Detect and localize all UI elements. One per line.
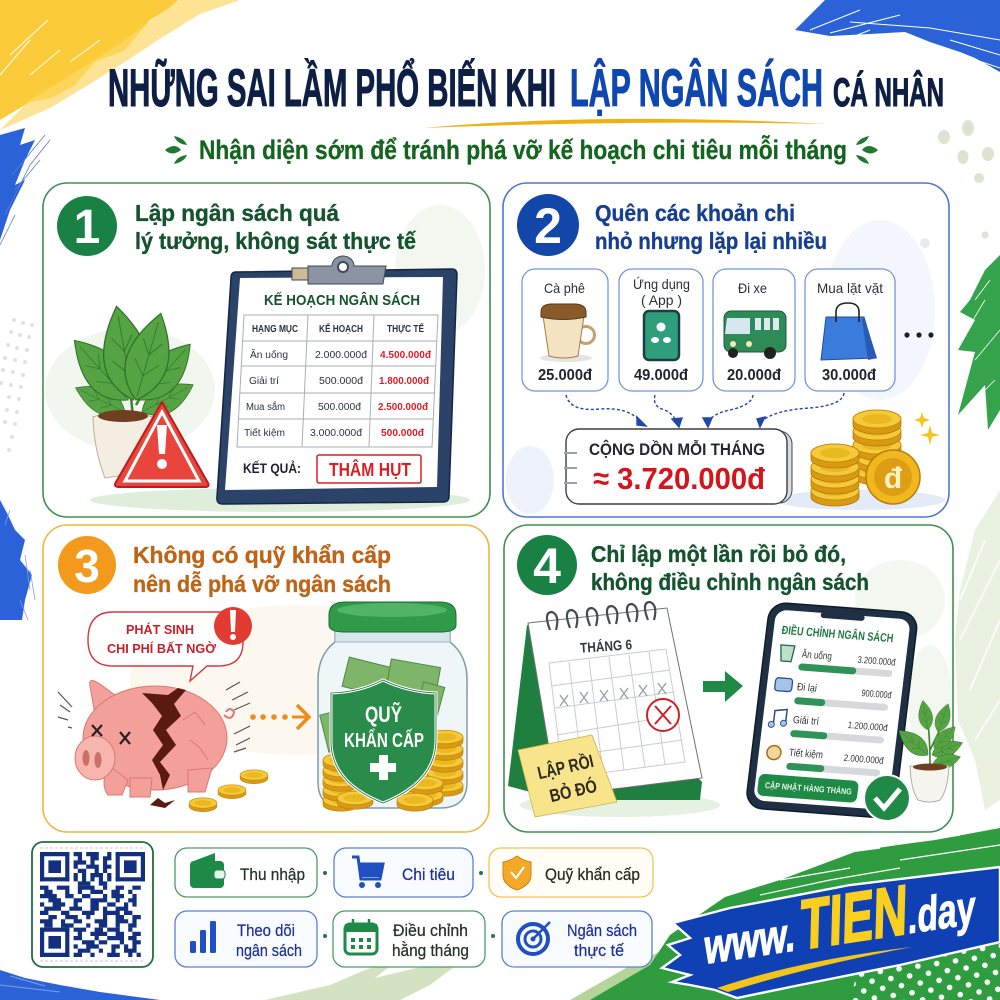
website text: www. — [703, 907, 796, 975]
row: food — [778, 645, 897, 677]
shield: KHẨN CẤP — [344, 729, 424, 752]
icon: emergency fund jar — [318, 602, 467, 811]
speech bubble: PHÁT SINH — [126, 622, 194, 637]
heading 3 — [133, 542, 391, 597]
row: savings: Tiết kiệm — [788, 747, 824, 761]
budget table: 500.000đ — [319, 376, 363, 387]
legend: tracking — [175, 911, 317, 967]
card: app: ( App ) — [641, 292, 682, 308]
subtitle: Nhận diện sớm để tránh phá vỡ kế hoạch chi tiêu mỗi tháng — [199, 134, 847, 165]
icon: coin stacks: đ — [884, 462, 903, 495]
card: coffee: Cà phê — [544, 280, 585, 296]
budget table: 2.000.000đ — [315, 350, 367, 361]
clip — [292, 256, 386, 284]
card: shopping bag: Mua lặt vặt — [817, 280, 883, 296]
legend: income: Thu nhập — [240, 865, 305, 884]
badge 3: 3 — [74, 540, 100, 592]
icon: desk calendar: THÁNG 6 — [580, 636, 633, 656]
result — [243, 455, 421, 483]
icon: desk calendar — [508, 602, 702, 800]
icon: budget phone — [745, 602, 919, 819]
legend: realistic budget: Ngân sách — [567, 921, 637, 940]
badge 2 — [517, 194, 579, 256]
budget table — [237, 291, 438, 447]
budget table: 500.000đ — [381, 428, 425, 439]
panel 2: small recurring costs — [503, 183, 949, 517]
badge 4: 4 — [533, 538, 561, 594]
budget table: 1.800.000đ — [379, 376, 430, 387]
speech bubble — [88, 607, 252, 681]
brush: blue left upper — [0, 128, 50, 245]
row: transport — [773, 678, 893, 711]
heading 3: nên dễ phá vỡ ngân sách — [133, 570, 391, 597]
legend: spending: Chi tiêu — [402, 865, 455, 884]
icon: small plant — [893, 699, 965, 802]
icon: broken piggy bank — [58, 680, 268, 812]
row: entertainment — [767, 708, 889, 744]
legend: monthly adjust: hằng tháng — [392, 941, 469, 960]
total box — [564, 429, 792, 504]
heading 3: Không có quỹ khẩn cấp — [133, 542, 391, 568]
decorative dots: left — [0, 318, 34, 452]
icon: budget phone: ĐIỀU CHỈNH NGÂN SÁCH — [781, 622, 894, 645]
legend: tracking: ngân sách — [236, 941, 302, 960]
legend: monthly adjust — [333, 911, 485, 967]
icon: coin stacks — [811, 410, 940, 506]
legend separator dots — [323, 871, 495, 938]
row: savings: 2.000.000đ — [843, 753, 885, 767]
card: bus: 20.000đ — [727, 367, 781, 384]
row: entertainment: Giải trí — [792, 714, 820, 728]
shield — [331, 680, 436, 803]
legend: tracking: Theo dõi — [237, 921, 295, 940]
brush: blue bottom-left — [0, 970, 160, 1000]
legend: income — [175, 848, 317, 897]
brush: light green bottom — [265, 940, 690, 1000]
card: bus: Đi xe — [738, 280, 767, 296]
heading 2: Quên các khoản chi — [595, 200, 795, 226]
brush: green bottom-right — [590, 828, 1000, 1000]
card: bus — [713, 269, 795, 391]
badge 2: 2 — [534, 198, 562, 254]
row: transport: 900.000đ — [861, 688, 893, 701]
badge 3 — [58, 536, 116, 594]
title: NHỮNG SAI LẦM PHỔ BIẾN KHI — [108, 58, 556, 118]
sticky note: BỎ ĐÓ — [547, 775, 599, 806]
legend: monthly adjust: Điều chỉnh — [393, 921, 468, 940]
budget table: 3.000.000đ — [310, 428, 362, 439]
result: THÂM HỤT — [329, 459, 411, 480]
heading 1: Lập ngân sách quá — [135, 200, 340, 226]
budget table: KẾ HOẠCH NGÂN SÁCH — [264, 291, 420, 309]
heading 2 — [595, 200, 827, 254]
card: coffee — [522, 269, 608, 391]
budget table: Ăn uống — [250, 348, 288, 361]
badge 1 — [57, 196, 117, 256]
icon: green check — [864, 775, 910, 821]
card: shopping bag — [805, 269, 895, 391]
arrow: dotted orange — [250, 705, 309, 729]
brush: blue left lower — [0, 500, 35, 620]
budget table: 4.500.000đ — [380, 350, 432, 361]
icon: plant — [61, 303, 203, 478]
decorative dots: top right — [938, 120, 994, 238]
ellipsis dots — [904, 332, 934, 338]
budget table: Giải trí — [249, 376, 279, 387]
legend: spending — [334, 848, 473, 897]
brush: yellow top-left — [0, 0, 278, 130]
card: coffee: 25.000đ — [538, 367, 592, 384]
badge 1: 1 — [74, 201, 100, 254]
shield: QUỸ — [365, 702, 402, 727]
card: app: Ứng dụng — [633, 276, 690, 292]
update button: CẬP NHẬT HÀNG THÁNG — [764, 779, 853, 797]
legend: realistic budget — [502, 911, 652, 967]
total box: CỘNG DỒN MỖI THÁNG — [589, 440, 765, 459]
legend: emergency fund — [489, 848, 653, 897]
row: food: 3.200.000đ — [857, 655, 897, 669]
row: savings — [765, 745, 885, 777]
card: app: 49.000đ — [634, 367, 688, 384]
heading 4 — [591, 541, 869, 595]
badge 4 — [517, 535, 577, 595]
brush: green right — [958, 255, 1000, 430]
heading 1 — [135, 200, 417, 254]
heading 4: Chỉ lập một lần rồi bỏ đó, — [591, 541, 846, 567]
budget table: THỰC TẾ — [387, 322, 424, 335]
website text — [703, 859, 977, 979]
budget table: 2.500.000đ — [378, 402, 429, 413]
result: KẾT QUẢ: — [243, 460, 301, 476]
panel 3: no emergency fund — [43, 525, 489, 832]
heading 4: không điều chỉnh ngân sách — [591, 569, 869, 595]
brush: blue top-right — [795, 0, 1000, 72]
sticky note — [518, 735, 617, 817]
dashed arrows — [566, 393, 844, 427]
legend: emergency fund: Quỹ khẩn cấp — [545, 865, 640, 884]
panel 4: set and forget — [504, 525, 965, 832]
card: shopping bag: 30.000đ — [822, 367, 876, 384]
row: transport: Đi lại — [796, 681, 818, 695]
update button — [757, 774, 859, 803]
sticky note: LẬP RỒI — [535, 750, 596, 783]
heading 2: nhỏ nhưng lặp lại nhiều — [595, 228, 827, 254]
total box: ≈ 3.720.000đ — [593, 461, 765, 496]
QR code — [32, 842, 153, 967]
card: app — [619, 269, 703, 391]
budget table: HẠNG MỤC — [252, 324, 298, 335]
row: entertainment: 1.200.000đ — [847, 720, 889, 734]
legend: realistic budget: thực tế — [574, 941, 625, 960]
budget table: Tiết kiệm — [244, 427, 285, 439]
heading 1: lý tưởng, không sát thực tế — [135, 228, 417, 254]
brush: blue website banner — [662, 867, 1000, 998]
budget table: 500.000đ — [318, 402, 361, 413]
icon: warning triangle — [115, 402, 209, 487]
budget table: KẾ HOẠCH — [319, 322, 363, 335]
row: food: Ăn uống — [801, 648, 833, 663]
website text: TIEN — [800, 869, 908, 965]
speech bubble: CHI PHÍ BẤT NGỜ — [107, 641, 217, 656]
brush: light green right — [955, 490, 1000, 810]
clipboard — [217, 256, 457, 504]
arrow: green — [703, 671, 743, 702]
title: LẬP NGÂN SÁCH — [570, 57, 823, 118]
budget table: Mua sắm — [246, 400, 285, 413]
panel 1: unrealistic budget — [43, 183, 490, 517]
